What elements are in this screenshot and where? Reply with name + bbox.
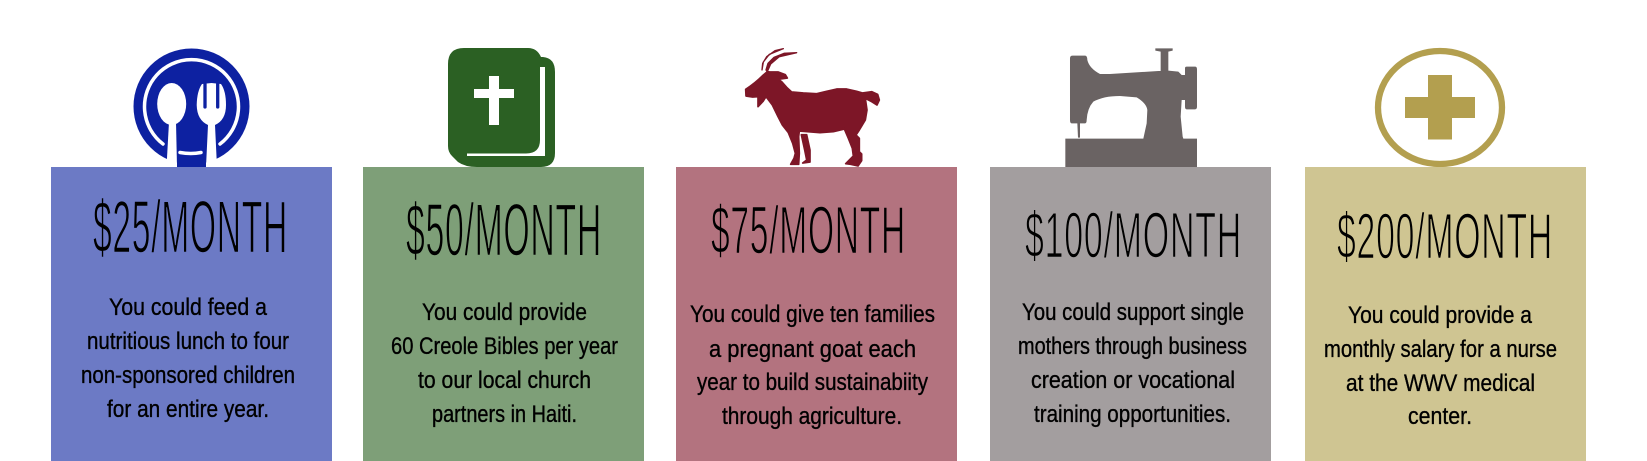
icon: plate with spoon and fork: [134, 48, 250, 167]
panel: $25 per month: $25/MONTH: [93, 186, 288, 268]
panel: $50 per month: [363, 48, 644, 461]
card background: [1305, 167, 1586, 461]
description: mothers through business: [1018, 333, 1247, 360]
description: [1324, 302, 1557, 430]
description: You could provide: [422, 299, 587, 326]
description: [81, 294, 295, 423]
panel: $75 per month: [676, 49, 957, 461]
description: year to build sustainabiity: [697, 369, 928, 396]
panel: $25 per month: [51, 48, 332, 461]
description: partners in Haiti.: [432, 401, 577, 428]
description: for an entire year.: [107, 396, 269, 423]
description: to our local church: [418, 367, 591, 394]
card background: [363, 167, 644, 461]
card background: [51, 167, 332, 461]
description: through agriculture.: [722, 403, 902, 430]
description: nutritious lunch to four: [87, 328, 289, 355]
panel: $50 per month: $50/MONTH: [406, 188, 602, 272]
description: creation or vocational: [1031, 367, 1235, 394]
description: You could feed a: [109, 294, 268, 321]
heading: $100/MONTH: [1025, 198, 1242, 272]
description: 60 Creole Bibles per year: [391, 333, 618, 360]
description: [690, 301, 935, 430]
description: [391, 299, 618, 428]
description: monthly salary for a nurse: [1324, 336, 1557, 363]
description: [1018, 299, 1247, 428]
icon: sewing machine: [1065, 48, 1197, 167]
description: center.: [1408, 403, 1472, 430]
description: a pregnant goat each: [709, 336, 916, 363]
icon: goat: [746, 49, 879, 166]
panel: $75 per month: $75/MONTH: [711, 194, 906, 268]
description: non-sponsored children: [81, 362, 295, 389]
card background: [676, 167, 957, 461]
description: at the WWV medical: [1346, 370, 1535, 397]
panel: $200 per month: [1305, 51, 1586, 461]
description: You could support single: [1022, 299, 1244, 326]
card background: [990, 167, 1271, 461]
description: You could provide a: [1348, 302, 1533, 329]
icon: Bible: [448, 48, 555, 167]
icon: medical cross: [1378, 51, 1502, 164]
panel: $100 per month: [990, 48, 1271, 461]
description: training opportunities.: [1034, 401, 1231, 428]
description: You could give ten families: [690, 301, 935, 328]
